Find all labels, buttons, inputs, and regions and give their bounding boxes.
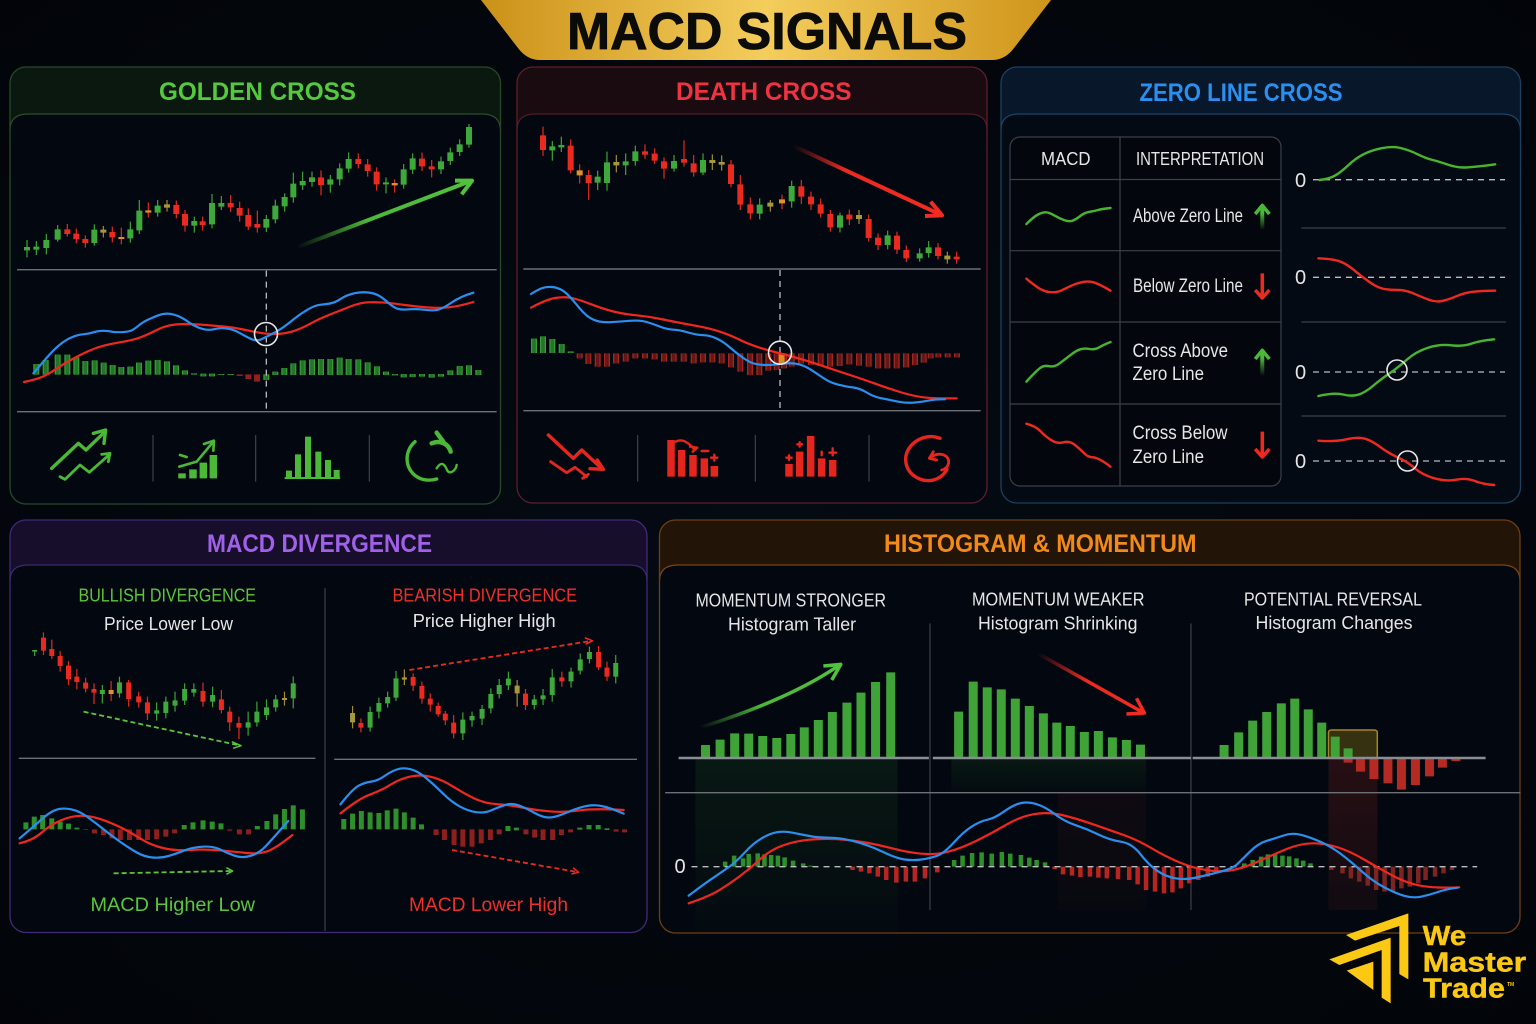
row: cross above zero line: Cross Above xyxy=(1132,340,1228,362)
label: momentum stronger: MOMENTUM STRONGER xyxy=(696,590,886,611)
bearish heading: BEARISH DIVERGENCE xyxy=(392,586,577,606)
label: momentum stronger: Histogram Taller xyxy=(728,613,856,634)
row: cross below zero line: Zero Line xyxy=(1132,446,1204,468)
panel: MACD divergence xyxy=(10,520,647,932)
heading: MACD divergence: MACD DIVERGENCE xyxy=(207,530,432,558)
bearish candles xyxy=(353,646,616,740)
chart: above zero xyxy=(1295,147,1505,192)
logo text: Trade xyxy=(1423,973,1505,1004)
sub-panel: bullish divergence xyxy=(19,586,315,916)
row: above zero line xyxy=(1026,205,1269,230)
label: potential reversal: Histogram Changes xyxy=(1256,612,1412,633)
row: below zero line xyxy=(1026,273,1269,298)
MACD chart with histogram xyxy=(523,269,981,411)
chart: cross above: 0 xyxy=(1295,362,1306,384)
MACD chart with histogram xyxy=(17,270,497,412)
logo text: We xyxy=(1423,920,1466,951)
label: momentum weaker: MOMENTUM WEAKER xyxy=(972,589,1144,610)
dashed arrow: MACD lower high xyxy=(452,850,579,874)
row: below zero line: Below Zero Line xyxy=(1133,275,1243,297)
label: momentum weaker: Histogram Shrinking xyxy=(978,612,1138,633)
row: cross above zero line: Zero Line xyxy=(1132,363,1204,385)
chart: above zero: 0 xyxy=(1295,170,1306,192)
chart: cross above xyxy=(1295,339,1505,396)
label: potential reversal xyxy=(1244,589,1422,633)
price candlestick chart xyxy=(27,124,469,257)
heading: histogram and momentum: HISTOGRAM & MOMENTUM xyxy=(884,530,1196,558)
histogram bars xyxy=(665,623,1520,910)
row: cross below zero line: Cross Below xyxy=(1132,422,1228,444)
bullish MACD xyxy=(19,758,315,858)
icon row xyxy=(52,430,457,482)
bearish MACD xyxy=(334,759,637,847)
column labels xyxy=(696,589,1422,634)
arrow: uptrend xyxy=(297,181,472,247)
chart: below zero: 0 xyxy=(1295,267,1306,289)
heading: zero line cross: ZERO LINE CROSS xyxy=(1140,79,1342,107)
row: cross below zero line xyxy=(1026,422,1269,468)
price candlestick chart xyxy=(543,127,957,264)
price note: Price Lower Low xyxy=(104,613,234,634)
panel: golden cross xyxy=(10,67,500,504)
panel: death cross xyxy=(517,67,987,503)
label: momentum weaker xyxy=(972,589,1144,633)
zero line charts xyxy=(1295,147,1506,485)
arrow: momentum up xyxy=(700,664,841,728)
sub-panel: bearish divergence xyxy=(334,586,637,916)
icon row xyxy=(548,435,949,482)
table header: MACD xyxy=(1041,148,1090,169)
bullish heading: BULLISH DIVERGENCE xyxy=(78,586,256,606)
row: above zero line: Above Zero Line xyxy=(1133,205,1243,227)
panel: histogram and momentum xyxy=(660,520,1520,933)
logo mark xyxy=(1329,913,1408,1003)
arrow: downtrend xyxy=(793,146,942,216)
chart: below zero xyxy=(1295,258,1505,301)
label: potential reversal: POTENTIAL REVERSAL xyxy=(1244,589,1422,610)
MACD note: MACD Lower High xyxy=(409,894,568,916)
logo text xyxy=(1423,920,1526,1004)
dashed arrow: MACD higher low xyxy=(114,868,233,874)
MACD note: MACD Higher Low xyxy=(90,894,256,916)
dashed arrow: price higher high xyxy=(409,638,592,670)
heading: death cross: DEATH CROSS xyxy=(676,78,852,106)
table header: INTERPRETATION xyxy=(1136,148,1264,169)
dashed arrow: price lower low xyxy=(84,712,241,748)
chart: cross below: 0 xyxy=(1295,451,1306,473)
heading: golden cross: GOLDEN CROSS xyxy=(159,78,356,106)
price note: Price Higher High xyxy=(413,610,556,631)
MACD momentum chart xyxy=(689,803,1477,903)
table: MACD interpretation xyxy=(1010,137,1281,486)
bullish candles xyxy=(35,632,293,739)
cross marker xyxy=(768,341,792,364)
zero label: 0 xyxy=(674,856,686,878)
row: cross above zero line xyxy=(1026,340,1269,385)
table header xyxy=(1041,148,1264,169)
chart: cross below xyxy=(1295,438,1505,485)
tinted highlight zones xyxy=(695,730,1377,932)
cross marker xyxy=(254,322,278,346)
logo text: Master xyxy=(1423,947,1526,978)
logo text: TM xyxy=(1507,982,1514,988)
logo: We Master Trade xyxy=(1329,913,1526,1004)
arrow: momentum down xyxy=(1038,653,1144,714)
title banner xyxy=(481,0,1051,61)
title text: MACD SIGNALS xyxy=(567,3,967,61)
panel: zero line cross xyxy=(1001,67,1520,503)
label: momentum stronger xyxy=(696,590,886,634)
